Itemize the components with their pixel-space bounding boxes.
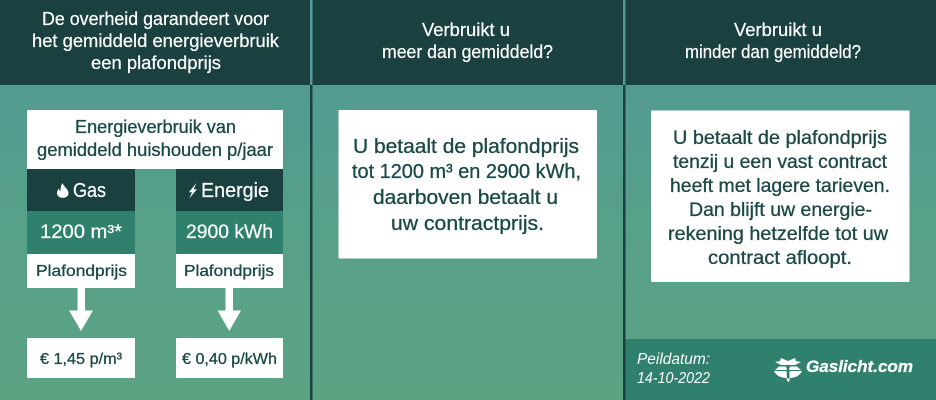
header: column 2: meer dan gemiddeld?: [382, 42, 553, 62]
panel: energieverbruik: gemiddeld huishouden p/jaar: [37, 140, 273, 160]
header: column 2: [382, 20, 553, 62]
header: column 3: [685, 20, 861, 62]
panel: meer dan gemiddeld: daarboven betaalt u: [373, 187, 558, 209]
panel: meer dan gemiddeld: U betaalt de plafondprijs: [353, 136, 579, 158]
panel: minder dan gemiddeld: U betaalt de plafondprijs: [673, 127, 887, 149]
peildatum: [637, 351, 710, 387]
header: column 1: De overheid garandeert voor: [42, 9, 269, 29]
panel: minder dan gemiddeld: rekening hetzelfde tot uw: [668, 223, 889, 245]
header: column 3: minder dan gemiddeld?: [685, 42, 861, 62]
panel: meer dan gemiddeld: uw contractprijs.: [391, 213, 544, 235]
header: column 2: Verbruikt u: [422, 20, 510, 40]
arrow: gas: [69, 288, 93, 331]
column: gas: Gas: [73, 180, 106, 202]
panel: meer dan gemiddeld: [338, 110, 597, 258]
panel: minder dan gemiddeld: Dan blijft uw energie-: [689, 199, 872, 221]
icon: lightning bolt: [189, 183, 197, 198]
column: gas: € 1,45 p/m³: [40, 351, 123, 368]
panel: minder dan gemiddeld: heeft met lagere tarieven.: [670, 175, 890, 197]
column: energie: 2900 kWh: [186, 222, 273, 243]
panel: minder dan gemiddeld: [651, 110, 910, 282]
panel: energieverbruik: [27, 110, 283, 169]
peildatum: 14-10-2022: [637, 370, 710, 387]
column: energie: Energie: [201, 180, 269, 202]
logo: Gaslicht.com: Gaslicht.com: [806, 357, 913, 376]
icon: flame: [57, 183, 68, 198]
header: column 1: het gemiddeld energieverbruik: [32, 31, 280, 51]
panel: energieverbruik: Energieverbruik van: [75, 117, 236, 137]
panel: meer dan gemiddeld: tot 1200 m³ en 2900 kWh,: [352, 161, 581, 183]
column: gas: 1200 m³*: [40, 222, 123, 243]
header: column 3: Verbruikt u: [734, 20, 822, 40]
arrow: energie: [218, 288, 241, 331]
column: energie: € 0,40 p/kWh: [182, 351, 277, 368]
header: column 1: een plafondprijs: [91, 53, 221, 73]
peildatum: Peildatum:: [637, 351, 710, 368]
column: energie: [176, 169, 283, 378]
logo: Gaslicht.com: [774, 357, 913, 382]
footer bar: [626, 339, 936, 400]
panel: minder dan gemiddeld: tenzij u een vast contract: [673, 151, 888, 173]
column: energie: Plafondprijs: [184, 263, 274, 280]
header: column 1: [32, 9, 280, 73]
column: gas: Plafondprijs: [36, 263, 127, 280]
panel: minder dan gemiddeld: contract afloopt.: [708, 247, 852, 269]
column: gas: [27, 169, 135, 378]
